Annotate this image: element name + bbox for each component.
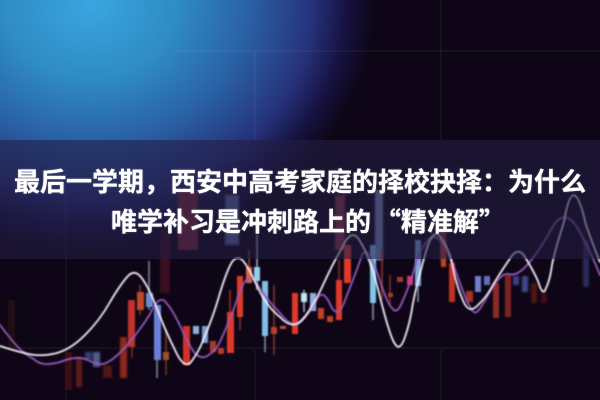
candlesticks <box>128 235 511 378</box>
title line 2: 唯学补习是冲刺路上的 “精准解” <box>111 202 505 239</box>
white moving-average curve <box>0 195 600 364</box>
pink moving-average curve <box>0 217 600 364</box>
title band <box>0 140 600 259</box>
faded candles <box>8 190 589 390</box>
title line 1: 最后一学期，西安中高考家庭的择校抉择：为什么 <box>14 162 586 199</box>
